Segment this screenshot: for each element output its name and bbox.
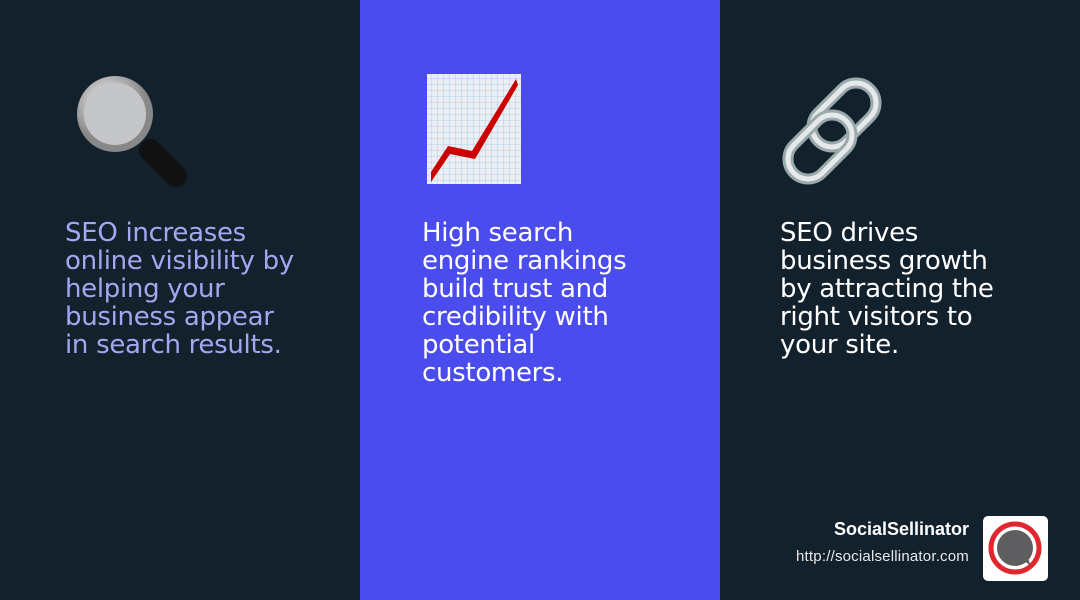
text: trust [422,218,626,388]
text: trust: potential [422,330,535,360]
text: trust: High search [422,218,573,248]
icon: chart [427,74,521,184]
text: visibility: SEO increases [65,218,246,248]
brand: name and url: http://socialsellinator.com [796,548,969,565]
text: visibility: business appear [65,302,274,332]
text: growth: SEO drives [780,218,918,248]
text: growth: business growth [780,246,988,276]
logo [983,516,1048,581]
text: growth: your site. [780,330,899,360]
icon: link [782,78,882,184]
text: visibility: helping your [65,274,225,304]
brand: name and url [796,519,969,565]
text: trust: credibility with [422,302,609,332]
icon: magnifying glass [77,76,187,187]
text: growth [780,218,994,360]
panel: growth [720,0,1080,600]
panel: trust [360,0,720,600]
brand: name and url: SocialSellinator [834,519,969,539]
panel: visibility [0,0,360,600]
text: visibility: online visibility by [65,246,294,276]
text: trust: customers. [422,358,563,388]
text: trust: build trust and [422,274,608,304]
text: growth: right visitors to [780,302,972,332]
text: growth: by attracting the [780,274,994,304]
text: trust: engine rankings [422,246,626,276]
text: visibility [65,218,294,360]
text: visibility: in search results. [65,330,282,360]
